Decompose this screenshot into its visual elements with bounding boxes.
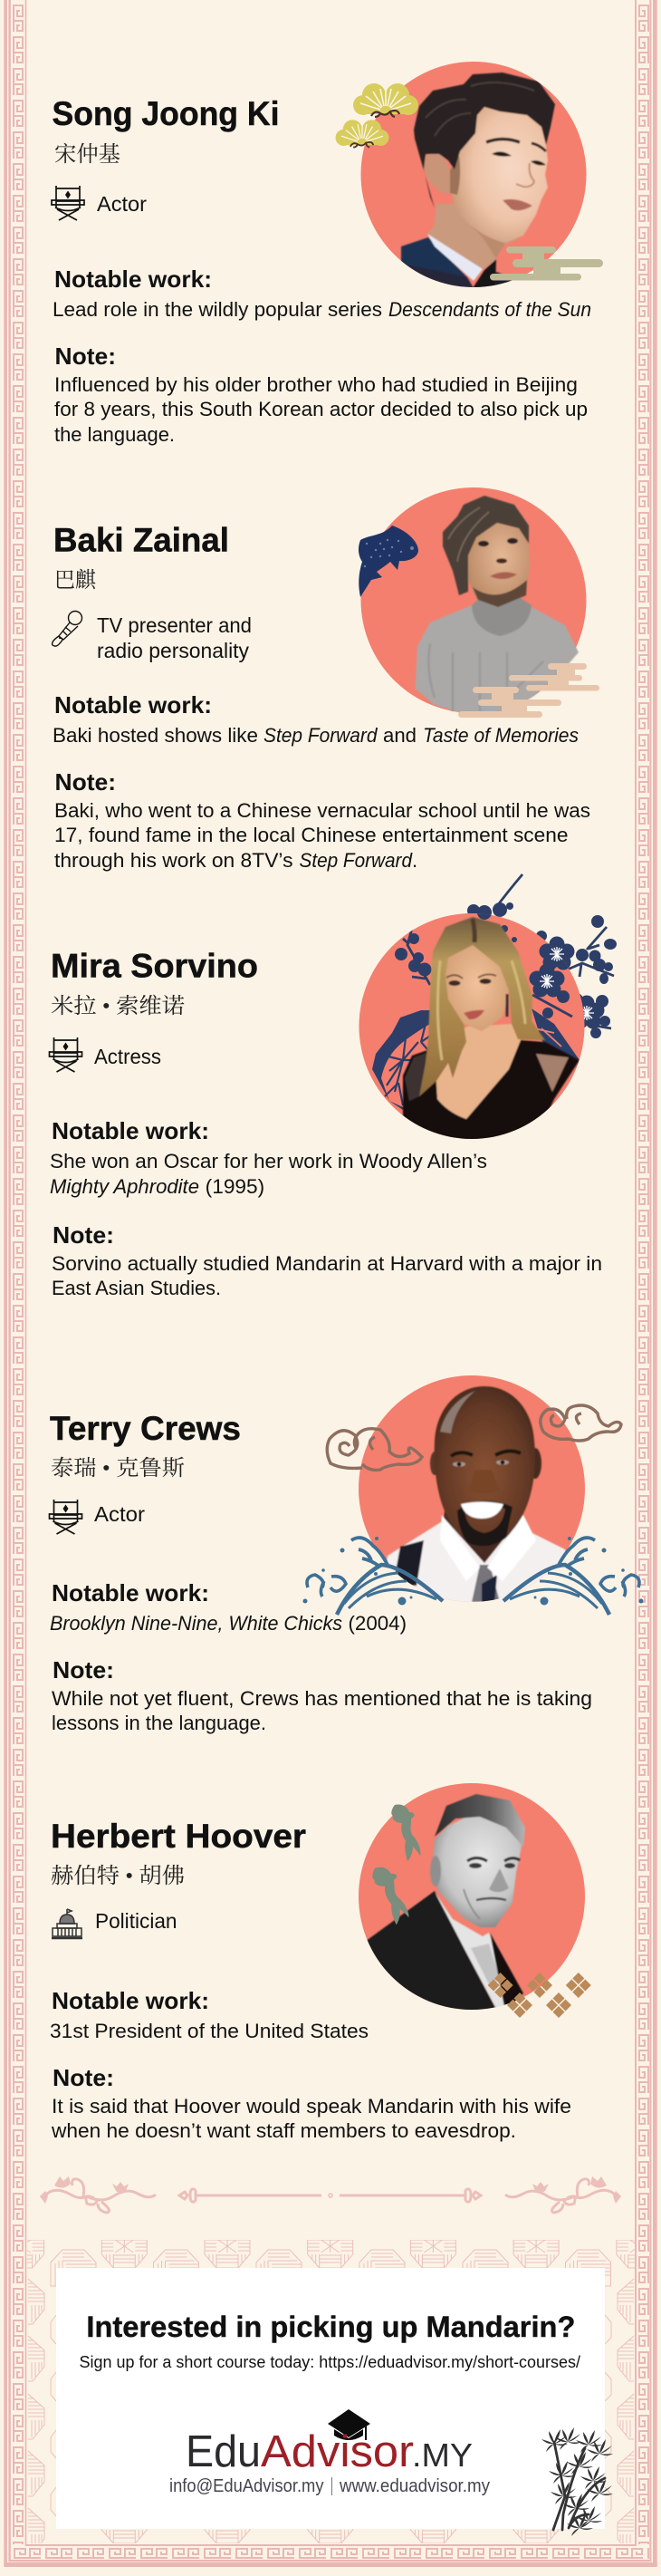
heading: notable work: Notable work: xyxy=(52,1987,209,2014)
note text xyxy=(52,1252,602,1299)
heading: notable work: Notable work: xyxy=(54,691,212,719)
notable work text xyxy=(53,724,579,747)
notable work text: Mighty Aphrodite xyxy=(50,1175,199,1198)
role: radio personality xyxy=(97,639,249,662)
note text xyxy=(51,2095,571,2142)
heading: note: Note: xyxy=(54,343,116,370)
icon: pine sprigs xyxy=(335,83,418,148)
logo: graduation cap xyxy=(328,2409,370,2440)
cta sub text: Sign up for a short course today: https://eduadvisor.my/short-courses/ xyxy=(80,2353,580,2371)
footer pattern xyxy=(27,2240,635,2543)
notable work text: Baki hosted shows like xyxy=(53,724,258,747)
note text: 17, found fame in the local Chinese entertainment scene xyxy=(54,824,569,846)
note text: for 8 years, this South Korean actor decided to also pick up xyxy=(54,398,588,420)
note text: lessons in the language. xyxy=(52,1712,266,1734)
portrait: Herbert Hoover xyxy=(359,1783,585,2016)
notable work text: and xyxy=(383,724,417,747)
name: Terry Crews xyxy=(50,1410,241,1447)
name: Herbert Hoover xyxy=(51,1818,306,1855)
logo: wordmark: .MY xyxy=(412,2436,473,2474)
notable work text: Descendants of the Sun xyxy=(388,298,591,321)
notable work text: Step Forward xyxy=(263,724,378,747)
contact details: www.eduadvisor.my xyxy=(339,2476,490,2496)
note text: Baki, who went to a Chinese vernacular school until he was xyxy=(54,799,590,822)
note text: While not yet fluent, Crews has mentioned that he is taking xyxy=(52,1687,592,1710)
notable work text: Taste of Memories xyxy=(423,724,579,747)
role: Politician xyxy=(95,1909,177,1933)
icon: cloud xyxy=(458,663,599,718)
role: Actor xyxy=(94,1502,145,1526)
icon: waves xyxy=(302,1537,443,1615)
name: Song Joong Ki xyxy=(53,95,279,132)
chinese name: 赫伯特 • 胡佛 xyxy=(51,1864,185,1888)
icon: capitol xyxy=(52,1909,82,1938)
note text: East Asian Studies. xyxy=(52,1277,221,1299)
logo: wordmark: Advisor xyxy=(261,2427,414,2476)
panel: call to action xyxy=(56,2268,613,2536)
heading: notable work: Notable work: xyxy=(52,1117,209,1144)
note text: the language. xyxy=(54,423,175,446)
chinese name: 米拉 • 索维诺 xyxy=(51,994,185,1018)
role: Actor xyxy=(97,192,147,216)
role xyxy=(97,613,252,662)
icon: diamonds xyxy=(488,1973,591,2018)
note text: . xyxy=(412,849,417,872)
portrait: Song Joong Ki xyxy=(360,62,587,290)
note text: It is said that Hoover would speak Mandarin with his wife xyxy=(52,2095,571,2118)
notable work text xyxy=(53,298,591,321)
panel: Herbert Hoover xyxy=(50,1783,591,2142)
notable work text: 31st President of the United States xyxy=(50,2020,369,2042)
notable work text: Brooklyn Nine-Nine, White Chicks xyxy=(50,1612,342,1635)
note text xyxy=(54,373,588,446)
note text xyxy=(52,1687,592,1734)
note text: Influenced by his older brother who had studied in Beijing xyxy=(54,373,578,396)
icon: director chair xyxy=(52,186,84,220)
heading: note: Note: xyxy=(53,2064,114,2091)
portrait: Mira Sorvino xyxy=(359,905,585,1142)
notable work text: Lead role in the wildly popular series xyxy=(53,298,382,321)
panel: Baki Zainal xyxy=(53,487,599,872)
note text: Sorvino actually studied Mandarin at Harvard with a major in xyxy=(52,1252,602,1275)
role: TV presenter and xyxy=(97,613,252,637)
chinese name: 宋仲基 xyxy=(54,142,120,167)
logo: wordmark: Edu xyxy=(186,2427,261,2476)
icon: cloud xyxy=(490,246,603,281)
note text: through his work on 8TV’s xyxy=(54,849,293,872)
notable work text: (1995) xyxy=(206,1175,264,1198)
icon: director chair xyxy=(49,1500,81,1534)
role: Actress xyxy=(94,1045,161,1068)
icon: waves right xyxy=(503,1537,643,1615)
name: Mira Sorvino xyxy=(51,948,258,984)
logo: wordmark xyxy=(186,2427,473,2476)
heading: note: Note: xyxy=(54,768,116,796)
icon: blossoms xyxy=(467,874,617,1038)
notable work text xyxy=(50,1150,487,1198)
icon: goldfish xyxy=(371,1804,421,1927)
cta heading: Interested in picking up Mandarin? xyxy=(86,2311,575,2343)
note text: when he doesn’t want staff members to eavesdrop. xyxy=(51,2119,516,2142)
icon: microphone xyxy=(53,611,81,646)
notable work text: She won an Oscar for her work in Woody Allen’s xyxy=(50,1150,487,1172)
contact details xyxy=(169,2476,490,2496)
icon: director chair xyxy=(49,1037,81,1072)
icon: fish xyxy=(359,526,418,597)
panel: Mira Sorvino xyxy=(49,874,617,1299)
white card xyxy=(56,2268,605,2529)
heading: notable work: Notable work: xyxy=(54,265,212,293)
portrait: Terry Crews xyxy=(359,1375,585,1613)
heading: note: Note: xyxy=(53,1221,114,1249)
portrait: Baki Zainal xyxy=(360,487,587,713)
heading: note: Note: xyxy=(53,1656,114,1684)
notable work text: (2004) xyxy=(348,1612,407,1635)
chinese name: 泰瑞 • 克鲁斯 xyxy=(51,1456,185,1481)
note text xyxy=(54,799,590,872)
icon: clouds xyxy=(327,1405,621,1470)
name: Baki Zainal xyxy=(53,522,229,558)
chinese name: 巴麒 xyxy=(54,568,97,593)
contact details: info@EduAdvisor.my xyxy=(169,2476,324,2496)
navy fan and branches xyxy=(372,905,580,1110)
panel: Terry Crews xyxy=(49,1375,643,1734)
icon: bamboo xyxy=(541,2427,613,2536)
panel: Song Joong Ki xyxy=(52,62,603,446)
divider ornament xyxy=(40,2176,621,2213)
heading: notable work: Notable work: xyxy=(52,1579,209,1606)
note text: Step Forward xyxy=(299,849,413,872)
